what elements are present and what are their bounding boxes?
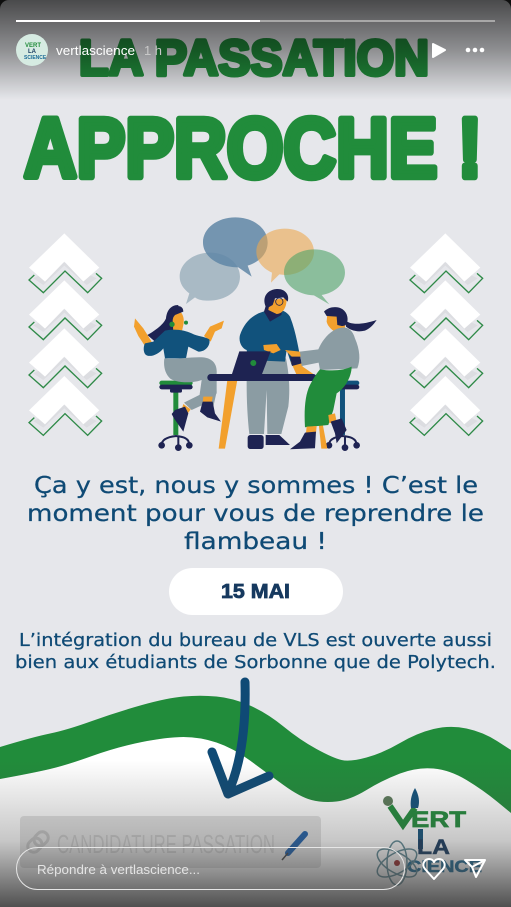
date pill xyxy=(169,568,343,615)
white lower area under wave xyxy=(0,737,511,907)
account avatar: SCIENCE xyxy=(24,55,47,61)
icon: heart xyxy=(423,859,445,879)
person: right woman xyxy=(285,307,377,449)
text: intro paragraph: flambeau ! xyxy=(184,529,327,555)
bottom shade xyxy=(0,760,511,907)
green wave xyxy=(0,696,511,813)
logo: Vert la science: LA xyxy=(417,836,450,859)
account avatar: LA xyxy=(28,49,37,55)
table legs xyxy=(219,380,327,449)
account avatar xyxy=(16,34,48,66)
reply input: Répondre à vertlascience... xyxy=(37,862,200,877)
link sticker: candidature passation: CANDIDATURE PASSATION xyxy=(57,829,275,859)
icon: more dots xyxy=(466,48,484,52)
person: man with glasses xyxy=(240,289,313,449)
speech bubbles xyxy=(180,217,345,304)
text: intro paragraph: Ça y est, nous y sommes ! C’est le xyxy=(34,473,478,499)
right stool xyxy=(326,381,360,451)
text: intro paragraph: moment pour vous de reprendre le xyxy=(27,501,484,527)
date pill: 15 MAI xyxy=(221,581,290,603)
icon: pen xyxy=(282,834,305,860)
person: left woman xyxy=(134,305,224,432)
account name and time: 1 h xyxy=(144,43,162,58)
icon: send xyxy=(465,860,485,877)
text: integration paragraph xyxy=(15,630,496,673)
icon: play xyxy=(433,44,445,57)
link sticker: candidature passation xyxy=(20,816,321,868)
account name and time: vertlascience xyxy=(56,43,135,58)
table top xyxy=(207,374,317,381)
icon: left chevrons xyxy=(29,233,102,435)
text: integration paragraph: L’intégration du bureau de VLS est ouverte aussi xyxy=(19,630,492,651)
text: intro paragraph xyxy=(27,473,484,555)
laptop xyxy=(232,351,271,375)
title: LA PASSATION: LA PASSATION xyxy=(79,30,429,86)
reply input xyxy=(16,848,404,890)
icon: link xyxy=(25,829,51,855)
illustration: team meeting xyxy=(134,217,377,451)
top shade xyxy=(0,0,511,100)
logo: Vert la science: ERT xyxy=(411,807,467,832)
logo: Vert la science: CIENCE xyxy=(407,857,482,876)
text: integration paragraph: bien aux étudiants de Sorbonne que de Polytech. xyxy=(15,652,496,673)
icon: right chevrons xyxy=(410,233,483,435)
progress bar xyxy=(16,20,495,22)
account avatar: VERT xyxy=(25,43,41,49)
arrow pointing down xyxy=(212,682,269,794)
logo: Vert la science xyxy=(373,788,482,885)
left stool xyxy=(158,381,193,451)
